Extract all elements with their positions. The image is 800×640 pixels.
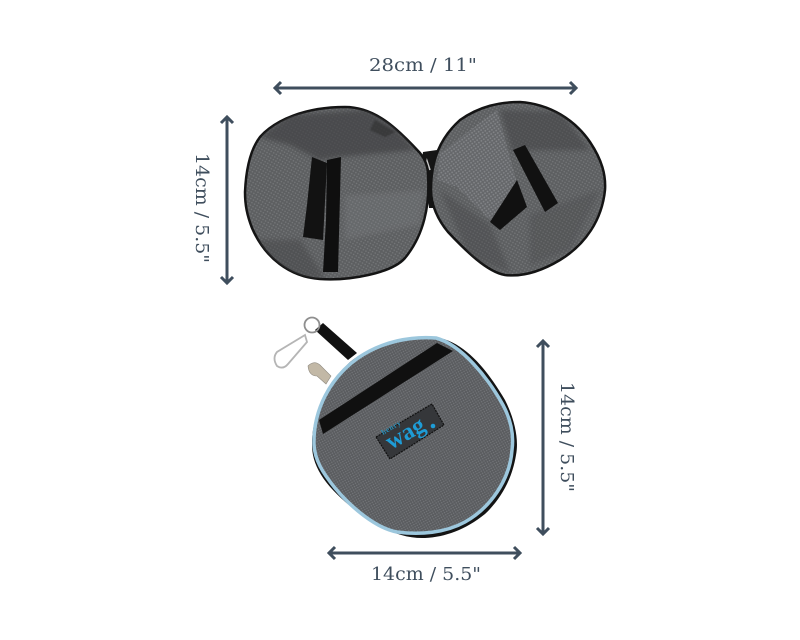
black strap right [323, 157, 341, 272]
zip pull [308, 363, 331, 384]
pouch front with blue trim [314, 338, 513, 533]
brand name small: henry [380, 418, 403, 437]
open bowl pouch photo [245, 102, 605, 280]
left half of open pouch [245, 107, 428, 280]
black strap left [303, 157, 327, 240]
width label: open pouch: 28cm / 11" [369, 56, 477, 76]
registered mark [431, 424, 435, 428]
closed bowl pouch photo [274, 318, 517, 538]
black strap loop [315, 323, 357, 360]
arrow: closed pouch height [537, 341, 549, 534]
arrow: open pouch width [275, 82, 576, 94]
arrow: open pouch height [221, 117, 233, 283]
pouch back shell [312, 338, 517, 538]
width label: closed pouch: 14cm / 5.5" [371, 565, 481, 585]
zipper hinge and pull [420, 150, 437, 208]
height label: closed pouch: 14cm / 5.5" [556, 382, 576, 492]
brand label [376, 404, 444, 459]
height label: open pouch: 14cm / 5.5" [191, 153, 211, 263]
split ring [304, 318, 320, 332]
brand name large: wag [381, 412, 430, 455]
black strap short [490, 180, 527, 230]
black pocket zip strip [319, 343, 453, 434]
right half of open pouch [431, 102, 605, 275]
black strap long [513, 145, 558, 212]
arrow: closed pouch width [329, 547, 520, 559]
carabiner clip [274, 335, 307, 368]
